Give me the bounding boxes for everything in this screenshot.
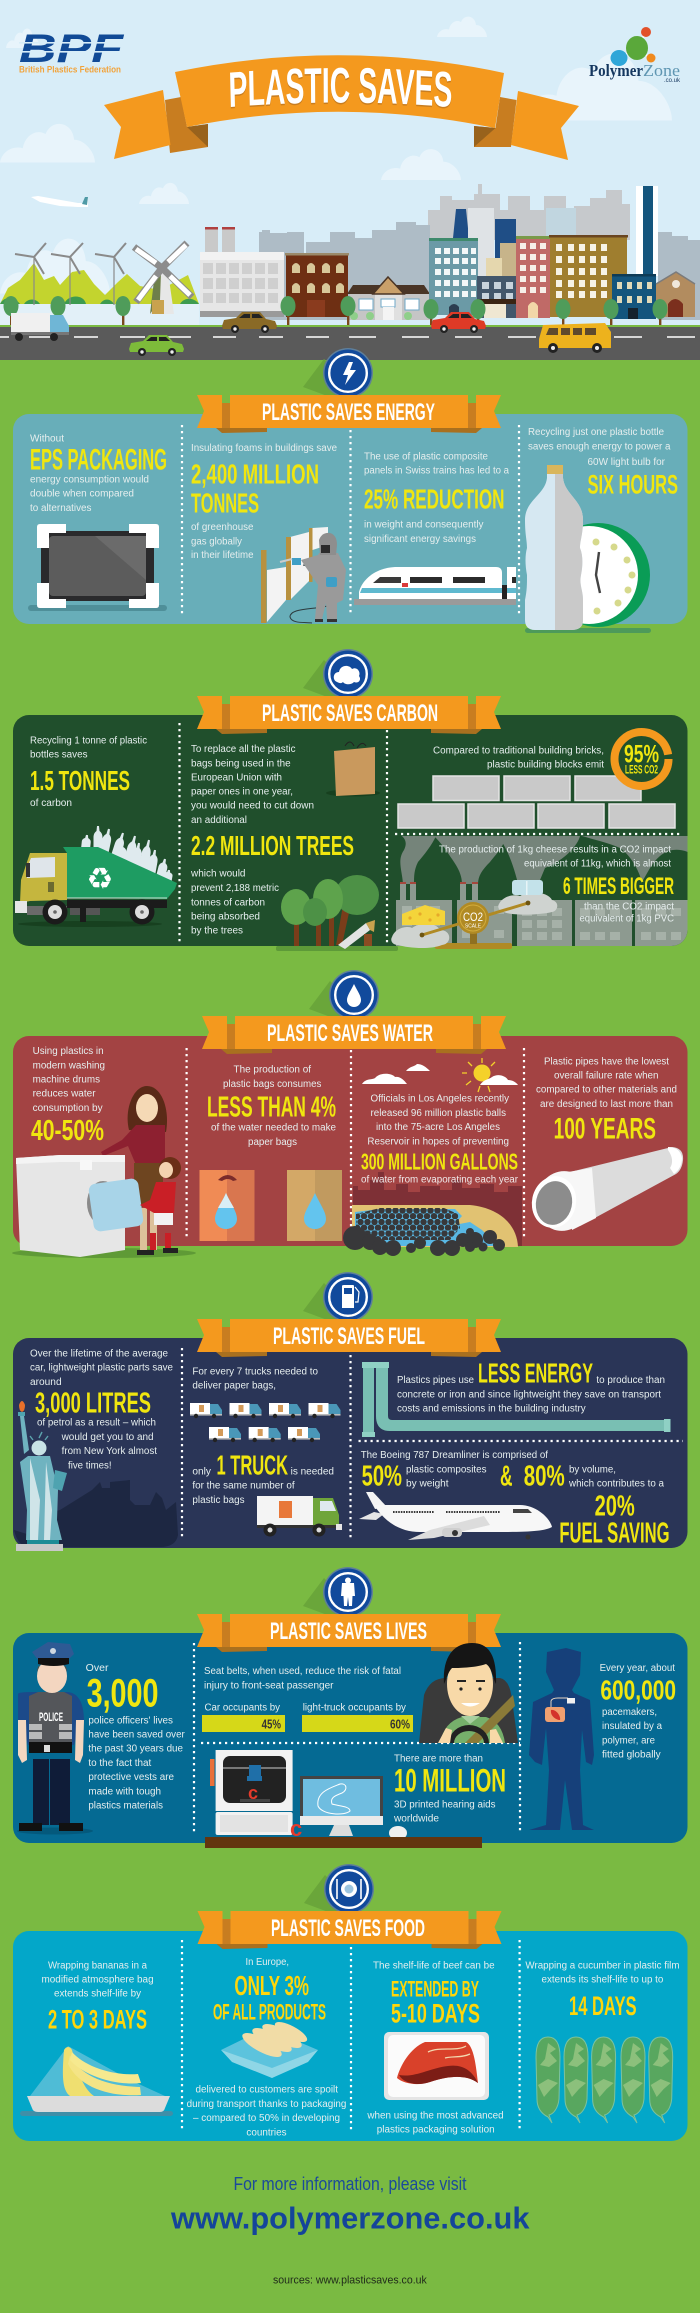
text: six hours: Recycling just one plastic bottle [528,427,664,438]
illustration: train [354,567,516,605]
logo: British Plastics Federation: British Plastics Federation [19,64,121,76]
text: dreamliner: by volume, [569,1464,616,1475]
text: washing drums: consumption by [33,1103,103,1114]
text: 2.2 million trees: 2.2 MILLION TREES [191,830,354,861]
text: dreamliner [361,1450,670,1549]
brown car [222,312,277,333]
section heading: energy: PLASTIC SAVES ENERGY [262,399,435,426]
text: 2.2 million trees: prevent 2,188 metric [191,883,279,894]
logo: PolymerZone [589,27,681,84]
section heading: food [198,1864,502,1949]
text: composite panels: in weight and consequently [364,520,484,531]
text: only 3%: OF ALL PRODUCTS [213,1999,326,2024]
icons: seven delivery trucks [190,1403,340,1442]
text: 10 million [393,1754,506,1825]
text: six hours: saves enough energy to power a [528,441,671,452]
hills [0,263,199,304]
text: 3,000 litres: of petrol as a result – which [37,1418,156,1429]
text: 2.2 million trees: paper ones in one year, [191,787,293,798]
text: dreamliner: by weight [406,1479,449,1490]
text: 7 trucks [192,1366,318,1392]
green car [129,335,184,356]
text: bananas: modified atmosphere bag [42,1975,154,1986]
illustration: sun and clouds [362,1058,518,1092]
title text [230,68,452,108]
text: 1 truck [192,1449,334,1506]
text: extended by: EXTENDED BY [391,1977,479,2002]
text: 1.5 tonnes: 1.5 TONNES [30,765,130,796]
text: 3,000 litres: Over the lifetime of the average [30,1349,168,1360]
panel: food [13,1931,688,2141]
text: washing drums: modern washing [33,1060,105,1071]
text: composite panels [364,451,509,545]
text: less energy: Plastics pipes use [397,1375,474,1386]
text: 2.2 million trees: bags being used in the [191,758,291,769]
text: washing drums: 40-50% [31,1115,104,1147]
text: less energy [397,1358,665,1414]
text: 1 truck: plastic bags [192,1495,245,1506]
panel: lives [13,1633,688,1848]
text: police officers [86,1663,185,1812]
text: pacemakers [600,1663,676,1761]
text: insulating foams: Insulating foams in buildings save [191,443,337,454]
back skyline blue grey [259,222,700,320]
road [0,325,700,360]
text: extended by: when using the most advanced [366,2110,504,2121]
text: dreamliner: 20% [595,1491,635,1523]
text: 2.2 million trees: being absorbed [191,912,260,923]
illustration: police officer: POLICE [39,1710,63,1724]
illustration: single truck [257,1496,342,1536]
text: 1 truck: for the same number of [192,1481,295,1492]
footer: website: www.polymerzone.co.uk [170,2200,530,2235]
text: dreamliner: which contributes to a [568,1479,664,1490]
text: police officers: to the fact that [88,1758,152,1769]
text: less energy: concrete or iron and since lightweight they save on transport [397,1389,661,1400]
ground behind town [0,304,199,326]
text: pacemakers: insulated by a [602,1721,662,1732]
text: EPS packaging: double when compared [30,489,134,500]
text: 6 times bigger: than the CO2 impact [584,901,674,912]
illustration: wrapped cucumbers [536,2037,673,2123]
text: composite panels: 25% REDUCTION [364,483,504,514]
text: less energy: costs and emissions in the building industry [397,1403,586,1414]
title text: PLASTIC SAVES [230,70,452,108]
chart: light-truck occupants 60%: 60% [390,1716,410,1731]
footer: sources: sources: www.plasticsaves.co.uk [273,2274,427,2286]
text: extended by: The shelf-life of beef can be [373,1960,495,1971]
text: bananas: extends shelf-life by [54,1989,141,2000]
text: 3,000 litres [30,1349,173,1471]
text: building bricks: Compared to traditional building bricks, [433,745,604,756]
text: dreamliner: The Boeing 787 Dreamliner is comprised of [361,1450,548,1461]
stat ring: 95% less CO2 [614,732,668,786]
blue building [612,274,656,319]
text: less than 4%: paper bags [248,1137,297,1148]
illustration: wrapped bananas [20,2046,173,2116]
title ribbon [104,55,579,160]
illustration: insulation worker [261,527,346,623]
text: 2.2 million trees: European Union with [191,772,282,783]
red car [431,312,486,333]
panel: water [12,1036,688,1258]
text: reservoir balls: Reservoir in hopes of preventing [367,1136,509,1147]
text: only 3% [187,1957,346,2138]
text: police officers: plastics materials [88,1801,163,1812]
text: 1 truck: only [192,1466,211,1477]
text: washing drums: Using plastics in [33,1046,104,1057]
text: insulating foams [191,443,337,561]
icon: packaged tv [28,524,167,611]
text: only 3%: In Europe, [246,1957,289,1968]
text: less than 4%: The production of [234,1065,311,1076]
text: evaporating: of water from evaporating each year [361,1175,519,1186]
text: police officers: 3,000 [87,1672,158,1716]
text: extended by: 5-10 DAYS [391,1999,480,2029]
text: reservoir balls [361,1094,518,1174]
text: 3,000 litres: around [30,1377,62,1388]
text: bananas: 2 TO 3 DAYS [48,2004,147,2034]
panel: fuel [13,1338,688,1551]
text: police officers: have been saved over [88,1730,185,1741]
text: 6 times bigger: equivalent of 11kg, which is almost [524,859,671,870]
text: 3,000 litres: five times! [68,1460,112,1471]
plastic building blocks [398,776,675,828]
text: washing drums: machine drums [33,1074,100,1085]
section heading: fuel [197,1272,501,1357]
delivery truck [11,313,69,341]
text: 3,000 litres: would get you to and [61,1432,154,1443]
illustration: police officer [17,1642,93,1834]
text: 10 million: worldwide [393,1814,439,1825]
illustration: packaged food tray [221,2018,318,2078]
section heading: lives: PLASTIC SAVES LIVES [270,1618,427,1645]
icon: paper bag [326,742,380,796]
text: EPS packaging: EPS PACKAGING [30,443,167,476]
driver hair overlapping ribbon [444,1643,496,1684]
text: EPS packaging [30,434,167,514]
text: insulating foams: of greenhouse [191,522,254,533]
text: police officers: the past 30 years due [88,1744,183,1755]
text: building bricks: plastic building blocks emit [487,760,604,771]
title text: PLASTIC SAVES [230,68,452,107]
illustration: family at washing machine [12,1086,196,1258]
text: EPS packaging: to alternatives [30,503,92,514]
text: composite panels: The use of plastic composite [364,451,488,462]
text: 10 million: There are more than [394,1754,483,1765]
text: extended by [366,1960,504,2136]
text: cucumber: Wrapping a cucumber in plastic film [525,1960,680,1971]
stat ring: 95% less CO2: 95% [624,741,659,769]
text: insulating foams: TONNES [191,487,259,518]
text: cucumber: 14 DAYS [569,1991,637,2021]
text: less than 4% [207,1065,336,1148]
text: dreamliner: 80% [524,1461,565,1493]
text: 100 years: are designed to last more than [540,1099,673,1110]
text: less than 4%: LESS THAN 4% [207,1092,336,1124]
chart: car occupants 45%: 45% [262,1716,281,1731]
section heading: water: PLASTIC SAVES WATER [267,1020,433,1047]
text: 3,000 litres: car, lightweight plastic parts save [30,1363,173,1374]
text: 2.2 million trees [190,744,354,937]
illustration: recycling truck: ♻ [87,862,113,897]
sky [0,0,700,326]
logo: PolymerZone: Polymer [589,61,643,80]
text: 7 trucks: deliver paper bags, [192,1381,276,1392]
text: 100 years: overall failure rate when [554,1071,658,1082]
text: 1.5 tonnes [30,735,147,809]
airplane [31,196,88,207]
illustration: monitor [300,1776,407,1840]
text: reservoir balls: released 96 million plastic balls [370,1108,506,1119]
street trees [4,296,668,328]
text: pacemakers: pacemakers, [602,1707,657,1718]
text: EPS packaging: Without [30,434,64,445]
clouds [0,17,672,294]
text: reservoir balls: into the 75-acre Los Angeles [376,1122,500,1133]
text: EPS packaging: energy consumption would [30,475,149,486]
text: dreamliner: plastic composites [406,1464,487,1475]
stat ring: 95% less CO2: LESS CO2 [625,762,658,776]
text: pacemakers: 600,000 [600,1674,676,1705]
illustration: plastic pipe [527,1147,683,1236]
section heading: fuel: PLASTIC SAVES FUEL [273,1323,425,1350]
text: 2.2 million trees: an additional [191,815,247,826]
tall building [636,186,658,276]
chart: light-truck occupants 60% [302,1703,413,1732]
text: less energy: to produce than [596,1375,665,1386]
house [347,277,430,320]
text: 6 times bigger: equivalent of 1kg PVC [580,914,674,925]
text: 2.2 million trees: To replace all the plastic [191,744,296,755]
text: 10 million: 3D printed hearing aids [394,1799,496,1810]
icon: paper bag with water drop [287,1170,342,1241]
footer: call to action: For more information, please visit [234,2174,466,2194]
text: 1.5 tonnes: Recycling 1 tonne of plastic [30,735,147,746]
text: composite panels: panels in Swiss trains has led to a [364,465,509,476]
illustration: trees and saw [276,875,398,951]
text: bananas: Wrapping bananas in a [48,1960,147,1971]
illustration: pipes [362,1362,670,1437]
text: 1.5 tonnes: of carbon [30,798,72,809]
text: 7 trucks: For every 7 trucks needed to [192,1366,318,1377]
pink building [516,236,550,318]
small dark building [477,276,518,318]
teal building [429,238,478,315]
illustration: recycling truck [15,826,177,927]
text: 1.5 tonnes: bottles saves [30,749,88,760]
illustration: 3d printer: c [290,1816,302,1841]
text: less energy: LESS ENERGY [478,1358,593,1389]
header scene [0,0,700,360]
smoke plumes [400,836,688,884]
text: dreamliner: & [500,1461,513,1493]
text: police officers: Over [86,1663,109,1674]
skyline silhouette [14,1480,178,1547]
text: less than 4%: of the water needed to make [211,1123,336,1134]
text: seat belts: injury to front-seat passenger [204,1680,334,1691]
yellow van [539,323,611,353]
text: 100 years: Plastic pipes have the lowest [544,1056,669,1067]
text: building bricks [433,745,604,771]
logo: PolymerZone: .co.uk [664,78,681,84]
illustration: 3d printer [210,1750,302,1841]
text: washing drums [31,1046,105,1147]
wind turbines [15,243,126,305]
section heading: food: PLASTIC SAVES FOOD [271,1915,425,1942]
logo: British Plastics Federation [19,27,125,76]
illustration: driver with seat belt [419,1652,518,1743]
text: police officers: protective vests are [88,1772,174,1783]
illustration: bottle and clock [525,465,651,633]
text: 6 times bigger [439,844,674,925]
illustration: factories and smoke [396,836,688,946]
church building [656,272,695,317]
panel: energy [13,414,688,633]
illustration: airplane [359,1492,552,1540]
back skyline light [428,184,630,240]
text: extended by: plastics packaging solution [377,2125,495,2136]
section heading: water [202,970,506,1054]
text: pacemakers: polymer, are [602,1735,655,1746]
brown building [285,253,349,317]
logo: PolymerZone: Zone [643,61,680,80]
illustration: packaged beef [384,2032,489,2100]
text: 100 years [536,1056,677,1145]
plastic bottles load [81,826,173,881]
text: 3,000 litres: 3,000 LITRES [35,1388,151,1420]
text: insulating foams: in their lifetime [191,550,254,561]
chart: light-truck occupants 60%: light-truck occupants by [303,1703,406,1714]
text: 2.2 million trees: which would [190,869,246,880]
text: reservoir balls: 300 MILLION GALLONS [361,1148,518,1174]
text: 1 truck: is needed [291,1466,334,1477]
text: police officers: police officers' lives [88,1715,173,1726]
text: 10 million: 10 MILLION [394,1763,506,1799]
text: six hours [528,427,678,499]
text: 1 truck: 1 TRUCK [216,1449,288,1480]
text: cucumber: extends its shelf-life to up to [542,1975,664,1986]
text: dreamliner: 50% [362,1461,402,1493]
text: only 3%: delivered to customers are spoilt [196,2085,338,2096]
text: 2.2 million trees: you would need to cut down [191,801,314,812]
factory [200,227,284,317]
illustration: CO2 scale: SCALE [465,924,482,930]
icon: plastic bag with water drop [200,1170,254,1241]
text: insulating foams: 2,400 MILLION [191,458,319,489]
chart: car occupants 45%: Car occupants by [204,1703,280,1714]
text: only 3%: during transport thanks to packaging [187,2099,346,2110]
panel: carbon [13,715,688,951]
text: insulating foams: gas globally [191,536,242,547]
text: only 3%: ONLY 3% [234,1970,309,2001]
table [205,1837,482,1848]
illustration: 3d printer: c [248,1783,258,1803]
text: 3,000 litres: from New York almost [62,1446,157,1457]
text: 2.2 million trees: tonnes of carbon [191,897,265,908]
bushes [0,296,199,304]
text: washing drums: reduces water [33,1089,96,1100]
section heading: energy [197,348,501,433]
text: seat belts [204,1666,401,1691]
text: only 3%: – compared to 50% in developing [193,2113,340,2124]
text: 6 times bigger: The production of 1kg cheese results in a CO2 impact [439,844,671,855]
text: reservoir balls: Officials in Los Angeles recently [370,1094,509,1105]
text: 2.2 million trees: by the trees [191,926,243,937]
text: cucumber [525,1960,680,2021]
section heading: carbon [197,649,501,734]
windmill [134,243,192,314]
text: only 3%: countries [246,2127,287,2138]
illustration: silhouette with pacemaker [529,1648,594,1830]
illustration: statue of liberty [16,1401,67,1551]
text: bananas [42,1960,154,2034]
illustration: CO2 scale: CO2 [463,910,483,924]
text: less than 4%: plastic bags consumes [223,1079,321,1090]
text: police officers: made with tough [88,1786,161,1797]
text: seat belts: Seat belts, when used, reduce the risk of fatal [204,1666,401,1677]
illustration: CO2 scale [391,880,557,949]
chart: car occupants 45% [202,1703,285,1732]
olive building [549,235,628,317]
text: composite panels: significant energy savings [364,534,476,545]
logo: British Plastics Federation: BPF [19,27,125,71]
section heading: carbon: PLASTIC SAVES CARBON [262,700,438,727]
text: pacemakers: Every year, about [600,1663,675,1674]
text: pacemakers: fitted globally [602,1750,661,1761]
text: six hours: 60W light bulb for [588,457,666,468]
section heading: lives [197,1567,501,1652]
illustration: reservoir [343,1172,522,1256]
text: 100 years: compared to other materials and [536,1085,677,1096]
